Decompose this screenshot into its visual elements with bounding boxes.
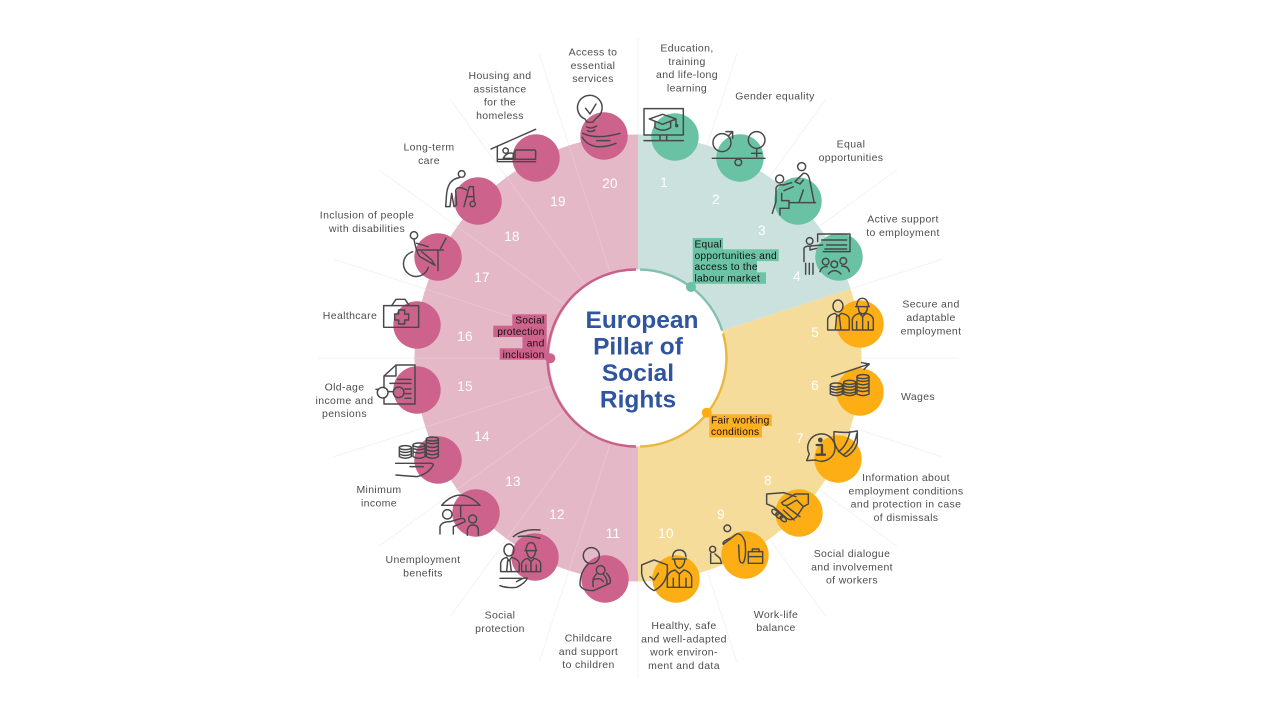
item 14: minimum income: 14 [474, 429, 490, 444]
icon: umbrella over people [440, 495, 480, 535]
item 9: work-life balance: Work-life [754, 609, 798, 621]
item 9: work-life balance: balance [756, 622, 796, 634]
callout: social protection label: and [527, 338, 545, 350]
item 2: gender equality [712, 90, 815, 207]
item 1: education, training and life-long learning: training [668, 56, 706, 68]
icon: protected workers [500, 530, 541, 588]
callout: equal opportunities label: access to the [694, 262, 758, 273]
item 11: childcare: to children [562, 659, 615, 671]
item 1: education, training and life-long learning: Education, [660, 42, 714, 54]
wedge: yellow sector [638, 289, 862, 582]
panel: equal opportunities and access to the labour market [638, 42, 940, 358]
item 1: education, training and life-long learning: 1 [660, 175, 668, 190]
item 17: inclusion of people with disabilities: Inclusion of people [320, 210, 414, 222]
item 7: information about employment conditions: employment conditions [849, 486, 963, 498]
callout: fair working conditions label: conditions [711, 427, 759, 438]
item 8: social dialogue and involvement of workers: Social dialogue [814, 548, 890, 560]
ring: equal opportunities arc [640, 270, 722, 331]
callout: social protection label: protection [497, 327, 544, 338]
item 19: housing and assistance for the homeless: for the [484, 96, 516, 108]
icon: parent, child and briefcase [710, 525, 763, 563]
item 10: healthy, safe and well-adapted work environment and data: ment and data [648, 660, 720, 672]
item 20: access to essential services [569, 46, 628, 191]
item 19: housing and assistance for the homeless: homeless [476, 110, 524, 122]
wedge: green sector [638, 134, 851, 358]
item 18: long-term care [403, 142, 520, 244]
ring: fair working arc [640, 334, 726, 446]
item 15: old-age income and pensions: pensions [322, 408, 367, 420]
icon: information bubble and shield [807, 431, 857, 461]
item 2: gender equality: Gender equality [735, 90, 815, 102]
item 15: old-age income and pensions: Old-age [325, 382, 364, 394]
item 11: childcare: 11 [606, 526, 620, 541]
icon: coins on hand [396, 437, 438, 477]
icon: coin stacks with rising arrow [830, 363, 869, 396]
item 20: access to essential services: 20 [602, 176, 618, 191]
icon: helping hand on stairs [772, 163, 816, 215]
item 13: unemployment benefits [386, 474, 521, 580]
item 17: inclusion of people with disabilities: 17 [474, 270, 490, 285]
item 19: housing and assistance for the homeless: 19 [550, 194, 566, 209]
item 4: active support to employment: to employment [866, 227, 940, 239]
item 4: active support to employment: 4 [793, 269, 801, 284]
item 8: social dialogue and involvement of workers: 8 [764, 473, 772, 488]
callout: equal opportunities label: labour market [694, 274, 760, 284]
item 15: old-age income and pensions: income and [316, 395, 373, 407]
item 7: information about employment conditions: of dismissals [874, 512, 938, 524]
item 3: equal opportunities: 3 [758, 223, 766, 238]
item 10: healthy, safe and well-adapted work environment and data: work environ- [649, 646, 718, 658]
callout: social protection label [493, 314, 547, 361]
item 13: unemployment benefits: Unemployment [386, 554, 460, 566]
icon: monitor with graduation cap [644, 109, 683, 141]
item 15: old-age income and pensions: 15 [457, 379, 473, 394]
item 9: work-life balance: 9 [717, 507, 725, 522]
item 10: healthy, safe and well-adapted work environment and data: and well-adapted [641, 634, 727, 646]
item 6: wages: 6 [811, 378, 819, 393]
icon: person with walker [446, 171, 475, 207]
item 5: secure and adaptable employment [811, 298, 961, 348]
item 10: healthy, safe and well-adapted work environment and data: Healthy, safe [651, 620, 717, 632]
item 17: inclusion of people with disabilities: with disabilities [328, 223, 405, 235]
item 19: housing and assistance for the homeless: Housing and [469, 70, 531, 82]
icon: two workers [828, 298, 873, 330]
callout: equal opportunities label: opportunities and [694, 251, 777, 262]
title: Pillar of [593, 334, 684, 360]
item 8: social dialogue and involvement of workers: of workers [826, 574, 878, 586]
item 3: equal opportunities [758, 138, 883, 238]
item 6: wages [811, 363, 935, 416]
icon: light bulb over hand [577, 95, 620, 147]
item 5: secure and adaptable employment: 5 [811, 325, 819, 340]
item 11: childcare: and support [559, 646, 618, 658]
marker: pink dot [545, 353, 555, 363]
callout: equal opportunities label: Equal [694, 240, 722, 250]
callout: fair working conditions label [709, 414, 772, 438]
item 7: information about employment conditions: 7 [796, 431, 804, 446]
item 8: social dialogue and involvement of workers [764, 473, 893, 586]
callout: social protection label: Social [515, 316, 544, 326]
item 10: healthy, safe and well-adapted work environment and data [641, 526, 727, 672]
title: Social [602, 360, 674, 387]
icon: medical case [384, 299, 419, 327]
item 14: minimum income [356, 429, 490, 510]
item 16: healthcare: Healthcare [323, 310, 377, 322]
item 1: education, training and life-long learning: learning [667, 82, 707, 94]
item 13: unemployment benefits: benefits [403, 568, 443, 580]
marker: green dot [686, 282, 696, 292]
item 7: information about employment conditions: and protection in case [851, 498, 961, 510]
item 5: secure and adaptable employment: employment [901, 326, 961, 338]
item 20: access to essential services: services [572, 73, 614, 85]
item 2: gender equality: 2 [712, 192, 720, 207]
item 17: inclusion of people with disabilities [320, 210, 490, 285]
icon: parent and child [580, 548, 610, 591]
item 7: information about employment conditions: Information about [862, 472, 950, 484]
item 12: social protection: Social [485, 610, 515, 622]
panel: social protection and inclusion [316, 46, 638, 671]
item 7: information about employment conditions [796, 431, 963, 524]
icon: document and glasses [376, 365, 415, 404]
item 10: healthy, safe and well-adapted work environment and data: 10 [658, 526, 674, 541]
item 14: minimum income: income [361, 498, 397, 510]
item 8: social dialogue and involvement of workers: and involvement [811, 562, 893, 574]
item 14: minimum income: Minimum [356, 484, 402, 496]
item 12: social protection [475, 507, 565, 635]
icon: shield and worker [642, 550, 692, 591]
callout: fair working conditions label: Fair working [711, 416, 770, 426]
item 5: secure and adaptable employment: adaptable [906, 312, 956, 324]
item 1: education, training and life-long learning [644, 42, 718, 190]
icon: wheelchair user at desk [403, 232, 446, 276]
callout: equal opportunities label [693, 238, 779, 284]
icon: trainer with group [804, 234, 850, 274]
item 18: long-term care: Long-term [403, 142, 455, 154]
item 6: wages: Wages [901, 391, 935, 403]
icon: handshake [767, 493, 808, 523]
item 16: healthcare [323, 299, 473, 349]
item 3: equal opportunities: opportunities [819, 152, 883, 164]
item 19: housing and assistance for the homeless [469, 70, 566, 209]
panel: fair working conditions [638, 289, 963, 672]
item 4: active support to employment [793, 214, 940, 284]
item 12: social protection: protection [475, 623, 525, 635]
title: Rights [600, 386, 676, 414]
item 18: long-term care: 18 [504, 229, 520, 244]
wedge: pink sector [414, 134, 638, 582]
item 3: equal opportunities: Equal [837, 138, 865, 150]
item 5: secure and adaptable employment: Secure and [902, 298, 960, 310]
item 18: long-term care: care [418, 155, 440, 167]
item 4: active support to employment: Active support [867, 214, 939, 226]
marker: yellow dot [702, 408, 712, 418]
centre circle [550, 270, 726, 446]
title: European [586, 307, 698, 334]
item 19: housing and assistance for the homeless: assistance [473, 84, 527, 96]
item 13: unemployment benefits: 13 [505, 474, 521, 489]
item 20: access to essential services: Access to [569, 46, 617, 58]
item 9: work-life balance [710, 507, 798, 634]
item 12: social protection: 12 [549, 507, 565, 522]
item 11: childcare: Childcare [565, 632, 612, 644]
item 20: access to essential services: essential [571, 60, 615, 72]
icon: balanced gender symbols [712, 132, 765, 166]
item 16: healthcare: 16 [457, 329, 473, 344]
ring: social protection arc [548, 270, 636, 446]
item 15: old-age income and pensions [316, 365, 473, 420]
icon: house with bed [491, 129, 536, 162]
callout: social protection label: inclusion [503, 350, 544, 361]
item 11: childcare [559, 526, 629, 671]
title [586, 307, 698, 414]
item 1: education, training and life-long learning: and life-long [656, 69, 718, 81]
